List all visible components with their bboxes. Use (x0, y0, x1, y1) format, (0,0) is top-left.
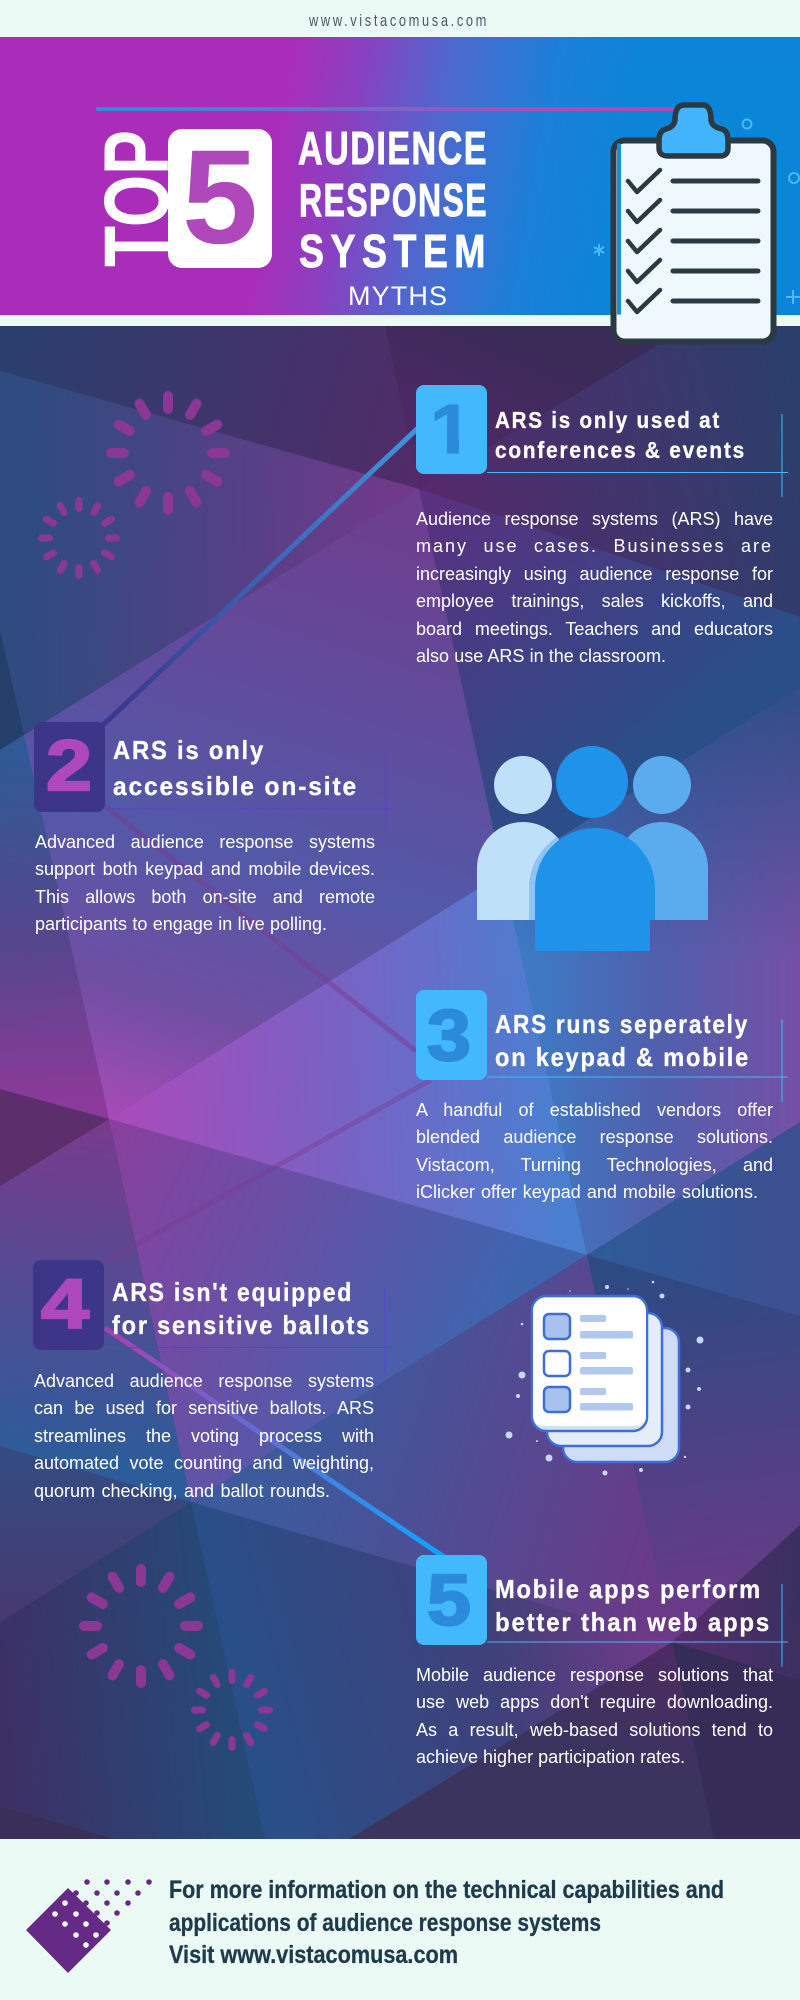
text: myth 3 body: iClicker offer keypad and mobile solutions. (416, 1182, 758, 1202)
text: myth 1 body: employee trainings, sales kickoffs, and (416, 591, 773, 611)
text: myth 2 body: Advanced audience response systems (35, 832, 375, 852)
header banner (0, 37, 800, 315)
text: myth 3 body: blended audience response solutions. (416, 1127, 773, 1147)
panel: myth 2: accessible on-site (113, 771, 358, 801)
text: myth 1 body: also use ARS in the classroom. (416, 646, 666, 666)
panel: myth 3 (416, 990, 788, 1202)
panel: myth 1 (416, 385, 788, 666)
panel: myth 3: ARS runs seperately (495, 1009, 749, 1039)
text: footer call to action (169, 1876, 724, 1969)
icon: group of people (477, 746, 708, 951)
icon: dotted diamond (26, 1879, 152, 1973)
text: myth 5 body (416, 1665, 773, 1767)
header title group: MYTHS (348, 281, 447, 311)
panel: myth 2: 2 (46, 727, 92, 806)
text: myth 1 body: Audience response systems (ARS) have (416, 509, 773, 529)
text: footer call to action: For more information on the technical capabilities and (169, 1876, 724, 1904)
text: myth 1 body (416, 509, 773, 666)
top url strip: www.vistacomusa.com (308, 11, 489, 30)
text: myth 1 body: board meetings. Teachers and educators (416, 619, 773, 639)
text: myth 3 body: A handful of established vendors offer (416, 1100, 773, 1120)
icon: clipboard checklist (594, 102, 800, 344)
text: myth 4 body: can be used for sensitive ballots. ARS (34, 1398, 374, 1418)
text: myth 4 body: Advanced audience response systems (34, 1371, 374, 1391)
header title group: 5 (182, 123, 258, 272)
panel: myth 4: ARS isn't equipped (112, 1277, 353, 1307)
polygon background (0, 326, 800, 1839)
header title group: RESPONSE (299, 174, 488, 226)
text: myth 5 body: use web apps don't require downloading. (416, 1692, 773, 1712)
icon: loading burst upper large (106, 391, 230, 515)
text: footer call to action: applications of audience response systems (169, 1909, 601, 1937)
text: myth 1 body: many use cases. Businesses are (416, 536, 773, 556)
text: myth 4 body: streamlines the voting process with (34, 1426, 374, 1446)
panel: myth 3: 3 (427, 996, 471, 1076)
footer (0, 1839, 800, 2000)
text: myth 3 body (416, 1100, 773, 1202)
panel: myth 2: ARS is only (113, 735, 265, 765)
icon: loading burst lower small (191, 1669, 273, 1751)
panel: myth 5: better than web apps (495, 1607, 771, 1637)
icon: loading burst lower large (79, 1564, 203, 1688)
header title group: TOP (86, 130, 188, 267)
panel: myth 5: 5 (427, 1561, 471, 1641)
header title group: SYSTEM (299, 225, 492, 277)
top url strip (0, 0, 800, 37)
text: myth 5 body: Mobile audience response solutions that (416, 1665, 773, 1685)
text: myth 2 body: participants to engage in live polling. (35, 914, 327, 934)
panel: myth 1: 1 (430, 390, 472, 468)
text: myth 5 body: achieve higher participation rates. (416, 1747, 685, 1767)
text: myth 4 body: automated vote counting and weighting, (34, 1453, 374, 1473)
panel: myth 2 (34, 722, 392, 934)
text: myth 1 body: increasingly using audience response for (416, 564, 773, 584)
text: footer call to action: Visit www.vistacomusa.com (169, 1941, 458, 1969)
text: myth 2 body: support both keypad and mobile devices. (35, 859, 375, 879)
panel: myth 3: on keypad & mobile (495, 1042, 750, 1072)
panel: myth 4: for sensitive ballots (112, 1310, 371, 1340)
icon: stacked documents (506, 1280, 704, 1476)
panel: myth 1: conferences & events (495, 437, 746, 463)
icon: loading burst upper small (38, 497, 120, 579)
panel: myth 5 (416, 1555, 788, 1767)
text: myth 5 body: As a result, web-based solutions tend to (416, 1720, 773, 1740)
text: myth 4 body: quorum checking, and ballot rounds. (34, 1481, 330, 1501)
text: myth 4 body (34, 1371, 374, 1501)
panel: myth 4: 4 (41, 1265, 89, 1343)
panel: myth 1: ARS is only used at (495, 407, 721, 433)
panel: myth 4 (33, 1260, 392, 1501)
text: myth 3 body: Vistacom, Turning Technologies, and (416, 1155, 773, 1175)
text: myth 2 body: This allows both on-site and remote (35, 887, 375, 907)
text: myth 2 body (35, 832, 375, 934)
header title group: AUDIENCE (298, 122, 488, 174)
header title group (86, 107, 675, 311)
panel: myth 5: Mobile apps perform (495, 1574, 762, 1604)
